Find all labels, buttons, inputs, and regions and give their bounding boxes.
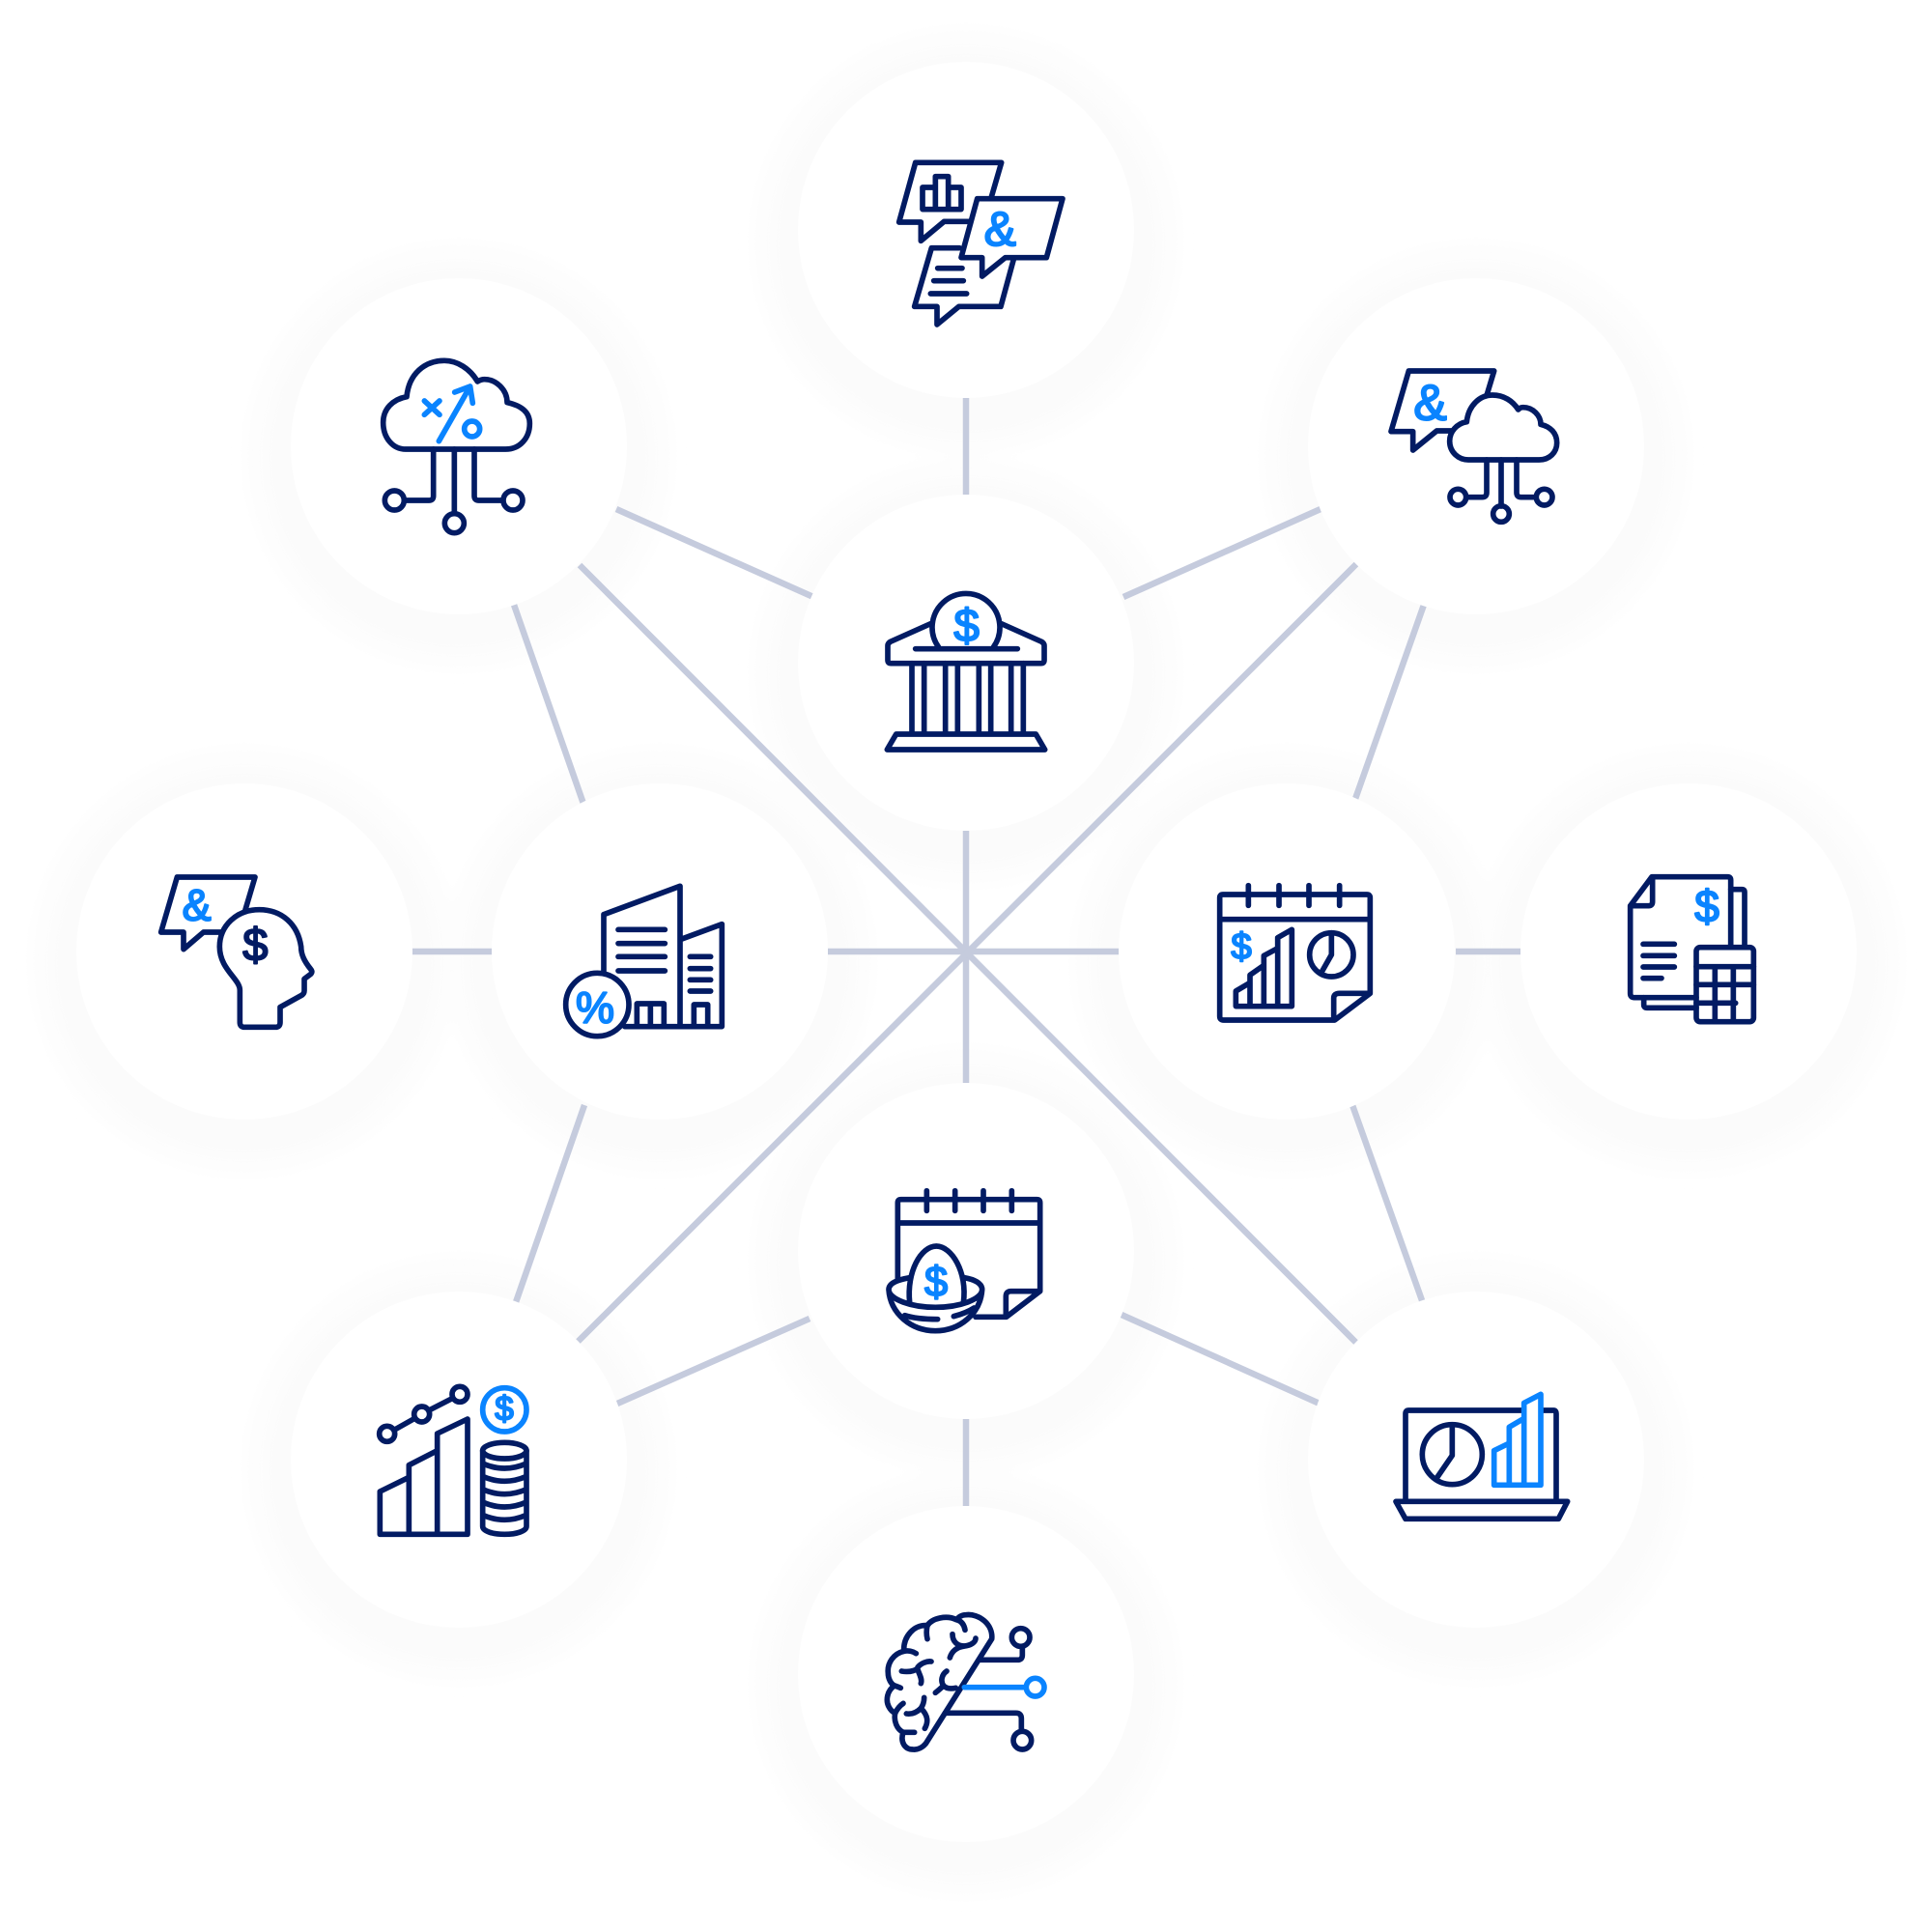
icon: office buildings with percent: % [576,982,614,1032]
icon: chat bubbles [899,162,1063,325]
icon: office buildings with percent [566,886,722,1037]
icon: head with dollar and bubble [161,877,312,1027]
connector lines [412,398,1520,1506]
icon: growth bars and coins [380,1386,526,1534]
icon: laptop with charts [1396,1394,1568,1519]
icon: chat bubble and cloud: & [1413,374,1447,430]
icon: head with dollar and bubble: & [183,881,212,930]
icon: cloud with percent arrow [384,360,529,533]
icon: growth bars and coins: $ [495,1390,514,1428]
icon: brain with circuits [887,1615,1044,1749]
icon: bank with coin: $ [953,601,980,652]
icon: chat bubble and cloud [1391,371,1557,522]
icon: documents and calculator [1631,877,1753,1022]
icon: bank with coin [887,593,1045,750]
icon: calendar with nest egg [889,1191,1040,1331]
icon: calendar with charts: $ [1231,926,1252,968]
icon: calendar with nest egg: $ [924,1259,948,1305]
icon: chat bubbles: & [984,202,1016,256]
icon: head with dollar and bubble: $ [242,919,268,970]
icon: documents and calculator: $ [1694,881,1719,931]
icon: calendar with charts [1220,886,1370,1020]
